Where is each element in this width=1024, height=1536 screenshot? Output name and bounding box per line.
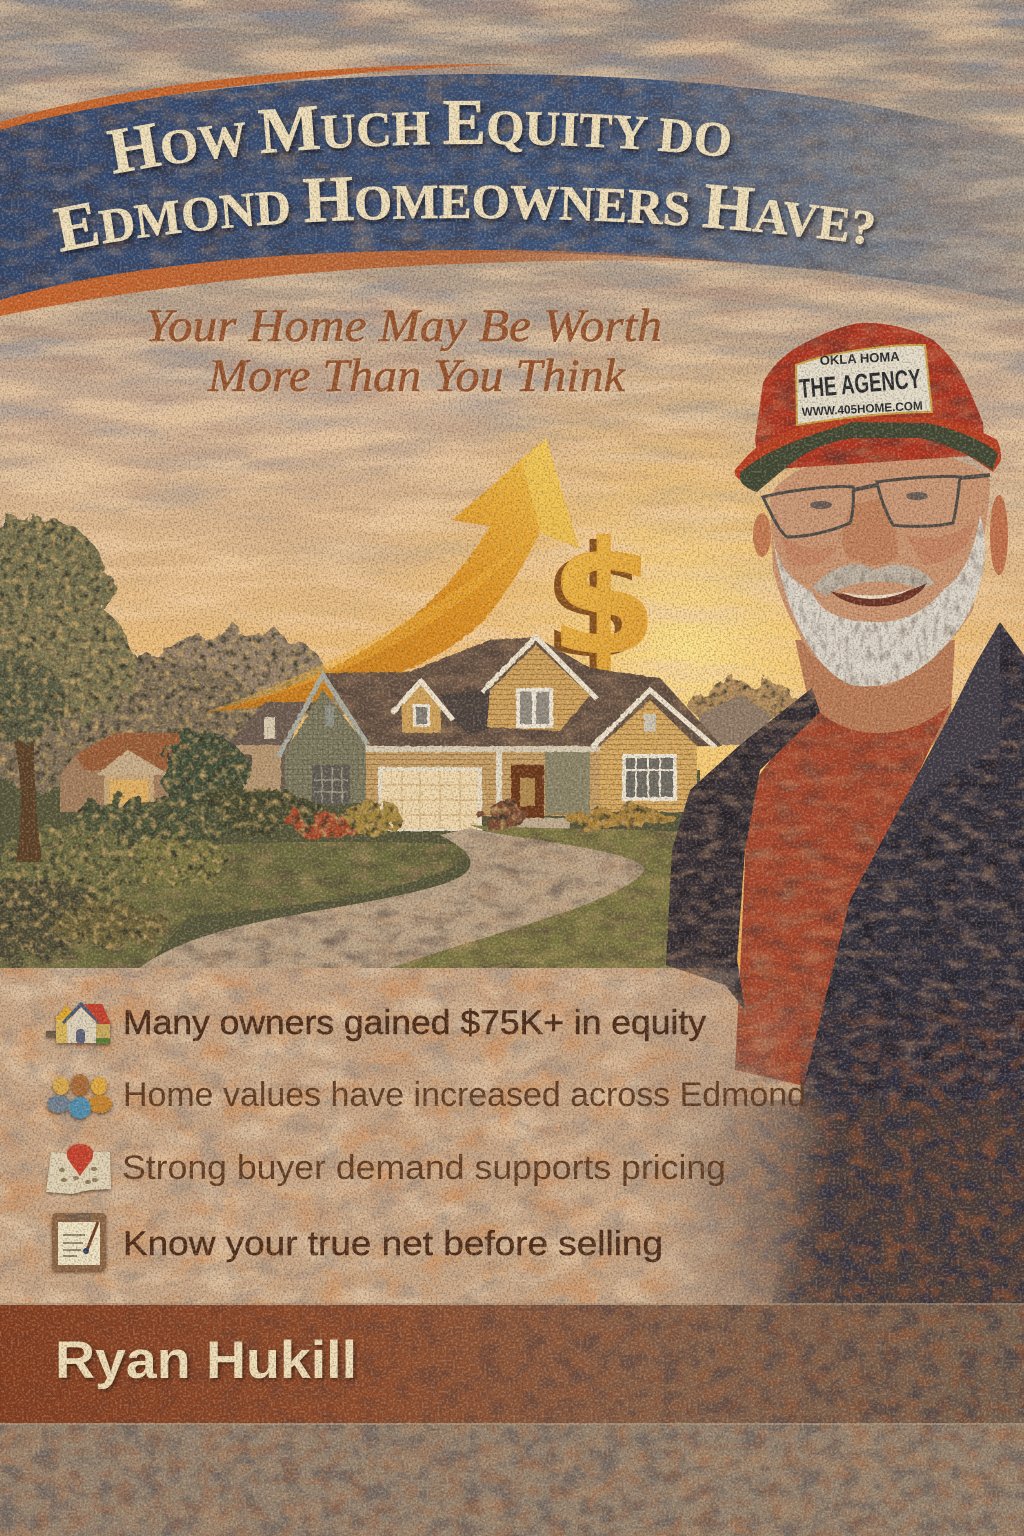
rising equity arrow	[200, 438, 579, 713]
bullet text 4: Know your true net before selling	[123, 1225, 663, 1263]
subtitle: Your Home May Be Worth	[145, 300, 662, 352]
bullet 3	[46, 1144, 726, 1194]
grey beard	[772, 515, 985, 686]
bullet 1	[46, 1004, 706, 1044]
ground base	[0, 770, 700, 970]
bullet text 1: Many owners gained $75K+ in equity	[123, 1004, 706, 1042]
cap	[735, 323, 1001, 492]
bullet text 3: Strong buyer demand supports pricing	[122, 1149, 726, 1187]
upper gable	[487, 645, 590, 731]
bullet text 2: Home values have increased across Edmond	[123, 1076, 806, 1114]
bullet 4	[52, 1213, 663, 1271]
dormer	[402, 685, 441, 733]
jacket right side	[770, 622, 1024, 1320]
lower walls	[366, 748, 600, 816]
bottom texture band	[0, 1425, 1024, 1536]
garage door	[378, 767, 482, 831]
face	[770, 450, 990, 687]
subtitle	[145, 300, 662, 402]
cap patch	[796, 345, 932, 425]
glasses	[763, 475, 990, 537]
title text: HOW MUCH EQUITY DO EDMOND HOMEOWNERS HAVE?	[52, 100, 878, 257]
icon: group of people	[47, 1074, 112, 1119]
subtitle: More Than You Think	[207, 350, 626, 402]
neighbouring houses	[60, 695, 772, 812]
info panel background	[0, 968, 860, 1305]
smile	[830, 583, 927, 606]
dollar sign: $	[542, 514, 649, 693]
front porch and door	[496, 752, 590, 819]
ears	[753, 495, 1008, 575]
right gable	[600, 700, 697, 812]
icon: clipboard and pen	[52, 1213, 106, 1271]
house roof	[323, 637, 722, 748]
red shirt	[735, 705, 950, 1090]
presenter portrait	[666, 323, 1024, 1320]
cap patch: WWW.405HOME.COM	[801, 399, 923, 419]
background: painted sunset sky	[0, 0, 1024, 980]
dollar sign: $	[550, 510, 657, 689]
cap patch: THE AGENCY	[798, 363, 922, 404]
main house	[278, 637, 722, 831]
neck	[795, 640, 955, 746]
name strip	[0, 1303, 1024, 1425]
name text: Ryan Hukill	[55, 1331, 357, 1390]
landscaping: lawns and driveway	[0, 825, 700, 985]
cap patch: OKLA HOMA	[819, 349, 901, 368]
portrait fade into panel	[640, 978, 825, 1320]
large tree	[0, 518, 133, 862]
right window	[622, 754, 677, 801]
shrubs and flower beds	[0, 733, 675, 960]
panel mottling	[0, 941, 1024, 1305]
stone gable wing	[285, 690, 366, 803]
bullet 2	[47, 1074, 806, 1119]
stone window	[312, 765, 350, 805]
title banner	[0, 64, 1024, 316]
background trees	[0, 630, 800, 797]
jacket left side	[666, 688, 820, 1010]
icon: house	[46, 1004, 111, 1044]
eyes	[810, 492, 928, 509]
icon: map with location pin	[46, 1144, 111, 1194]
